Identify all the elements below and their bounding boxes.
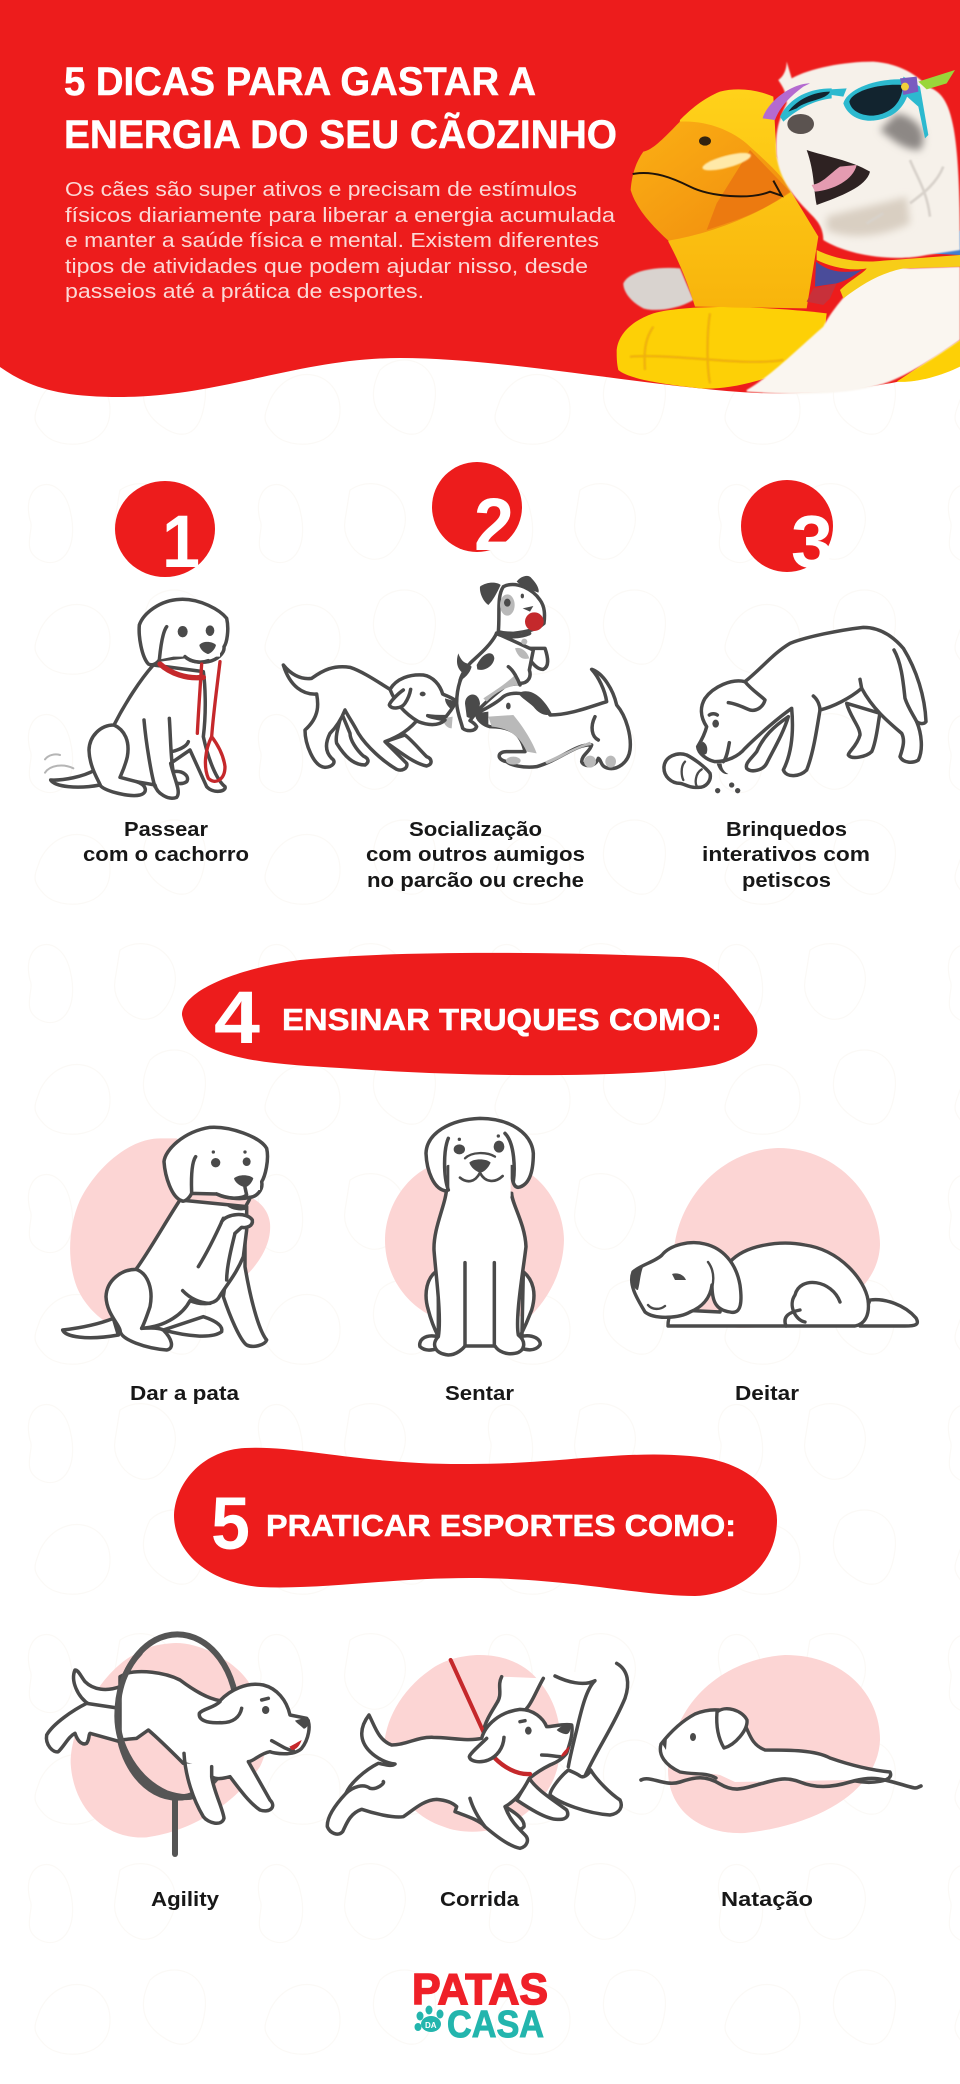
logo: patas da casa: PATAS [412,1965,548,2014]
photo: duck head and neck [668,89,818,308]
photo: duck face [631,122,792,241]
step 1 number badge [115,481,215,583]
caption: socialização [366,819,585,892]
photo: dog head fur [776,62,960,258]
illustration: agility [46,1634,310,1854]
banner 5: praticar esportes [174,1448,777,1596]
photo: inflatable ring [617,307,827,389]
banner 4: ensinar truques: 4 [214,976,260,1059]
caption: socialização: Socialização [409,819,542,841]
illustration: natação [641,1655,921,1833]
hoop front arc [117,1653,193,1797]
banner 4: ensinar truques [182,953,757,1075]
intro paragraph: passeios até a prática de esportes. [65,281,424,303]
pink blob: dar a pata [70,1138,270,1323]
pink blob [668,1655,880,1833]
leash [451,1660,483,1732]
dog running [327,1709,572,1848]
intro paragraph: tipos de atividades que podem ajudar nisso, desde [65,256,588,278]
caption: brinquedos [702,819,870,892]
photo: collar and vest [807,283,837,305]
human legs [483,1663,628,1815]
illustration: corrida [327,1655,628,1848]
illustration: dog with leash sitting [45,599,228,798]
caption: corrida: Corrida [440,1889,520,1911]
header red wave background [0,0,960,397]
title [64,60,617,157]
dog: dalmatian with red ball [457,576,548,731]
step 1 number badge: 1 [162,500,200,583]
illustration: three dogs socializing [283,576,630,770]
caption: agility: Agility [151,1889,220,1911]
dog hind leg [184,1753,224,1823]
caption: socialização: no parcão ou creche [367,870,584,892]
caption: passear: com o cachorro [83,844,249,866]
pink blob: sentar [385,1165,564,1317]
caption: passear: Passear [124,819,208,841]
intro paragraph: Os cães são super ativos e precisam de estímulos [65,179,577,201]
photo: dog with sunglasses on inflatable duck [617,62,960,394]
photo: dog body [747,267,960,394]
hoop and post [117,1634,237,1854]
pink blob [674,1148,880,1328]
step 2 number badge [432,462,522,566]
dog swimming [641,1709,921,1789]
caption: natação: Natação [721,1889,813,1911]
dog [632,1243,917,1326]
caption: brinquedos: interativos com [702,844,870,866]
logo: patas da casa [412,1965,548,2046]
intro paragraph: físicos diariamente para liberar a energia acumulada [65,205,616,227]
intro paragraph: e manter a saúde física e mental. Existem diferentes [65,230,599,252]
photo: nose and mouth [787,114,814,134]
title: ENERGIA DO SEU CÃOZINHO [64,111,617,157]
pink blob [384,1655,560,1832]
dog jumping [46,1670,310,1811]
caption: sentar: Sentar [445,1383,514,1405]
photo: sunglasses [763,83,810,120]
illustrations: dar a pata and sentar [63,1118,564,1355]
dog: dar a pata [63,1127,267,1350]
banner 5: praticar esportes: PRATICAR ESPORTES COMO: [266,1508,736,1543]
dog: sentar [420,1118,540,1355]
dog: spotted dachshund [475,669,630,769]
photo: dog paw [623,268,693,310]
caption: passear [83,819,249,866]
icon: paw: DA [425,2021,437,2030]
title: 5 DICAS PARA GASTAR A [64,60,536,104]
banner 5: praticar esportes: 5 [211,1482,250,1565]
banner 4: ensinar truques: ENSINAR TRUQUES COMO: [282,1002,722,1037]
caption: deitar: Deitar [735,1383,799,1405]
step 3 number badge: 3 [791,500,833,583]
step 3 number badge [741,480,833,583]
caption: socialização: com outros aumigos [366,844,585,866]
caption: brinquedos: petiscos [742,870,831,892]
logo: patas da casa: CASA [447,2004,544,2046]
pink blob [71,1643,267,1837]
caption: brinquedos: Brinquedos [726,819,847,841]
dog: puppy [283,665,456,770]
illustration: dog sniffing toy with treats [664,627,926,793]
step 2 number badge: 2 [474,483,514,566]
photo: duck mouth line [633,173,782,196]
illustration: deitar [632,1148,917,1328]
caption: dar a pata: Dar a pata [130,1383,240,1405]
intro paragraph [65,179,616,303]
